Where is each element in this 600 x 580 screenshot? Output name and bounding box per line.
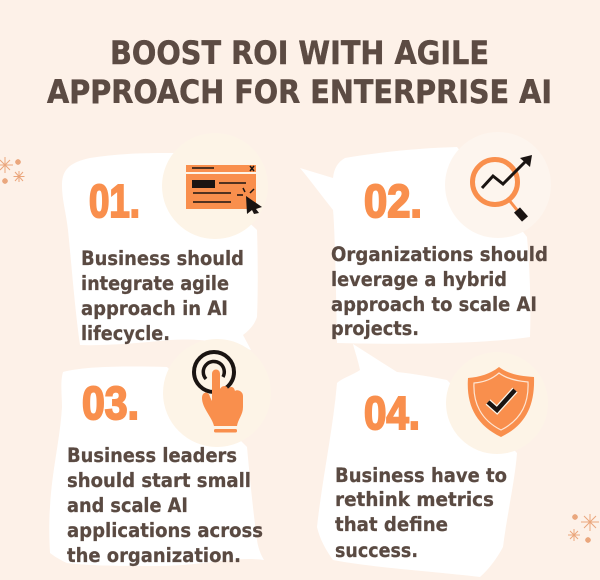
title bbox=[47, 34, 552, 111]
panel 1 text bbox=[81, 247, 244, 345]
panel 3 text: Business leaders bbox=[67, 444, 237, 467]
panel 3 number: 03. bbox=[82, 377, 139, 429]
panel 2 number: 02. bbox=[364, 175, 422, 227]
icon: magnifier with rising chart bbox=[472, 155, 532, 219]
panel 2 bbox=[300, 132, 551, 344]
panel 1 icon backdrop bbox=[162, 133, 268, 239]
panel 4 text: success. bbox=[335, 539, 418, 562]
title: APPROACH FOR ENTERPRISE AI bbox=[47, 73, 552, 111]
panel 3 text: and scale AI bbox=[67, 494, 188, 517]
panel 4 text: that define bbox=[335, 513, 448, 536]
panel 2 text: Organizations should bbox=[331, 243, 548, 266]
panel 2 text: projects. bbox=[331, 317, 419, 340]
panel 3 bbox=[49, 339, 271, 567]
panel 3 text: applications across bbox=[67, 519, 263, 542]
panel 3 text: the organization. bbox=[67, 544, 241, 567]
panel 2 speech bubble bbox=[300, 147, 530, 344]
title: BOOST ROI WITH AGILE bbox=[110, 34, 489, 72]
panel 1 bbox=[62, 133, 268, 350]
panel 3 text bbox=[67, 444, 263, 567]
panel 2 text: leverage a hybrid bbox=[331, 268, 507, 291]
panel 2 text bbox=[331, 243, 548, 340]
panel 1 text: integrate agile bbox=[81, 272, 229, 295]
panel 3 icon backdrop bbox=[163, 339, 271, 447]
panel 1 text: lifecycle. bbox=[81, 322, 170, 345]
panel 4 text: Business have to bbox=[335, 464, 507, 487]
panel 1 number: 01. bbox=[89, 175, 140, 227]
decorative stars: top left bbox=[0, 157, 24, 184]
panel 4 speech bubble bbox=[317, 344, 517, 577]
panel 1 text: approach in AI bbox=[81, 297, 228, 320]
panel 4 icon backdrop bbox=[446, 352, 548, 454]
panel 4 text bbox=[335, 464, 507, 562]
panel 4 bbox=[317, 344, 548, 577]
icon: hand tapping bbox=[194, 352, 243, 432]
icon: browser window with cursor bbox=[186, 165, 262, 214]
panel 4 text: rethink metrics bbox=[335, 488, 494, 511]
panel 2 icon backdrop bbox=[445, 132, 551, 238]
panel 1 text: Business should bbox=[81, 247, 244, 270]
decorative stars: bottom right bbox=[568, 514, 599, 543]
panel 3 text: should start small bbox=[67, 469, 251, 492]
panel 4 number: 04. bbox=[364, 387, 420, 439]
panel 3 speech bubble bbox=[49, 367, 264, 566]
panel 1 speech bubble bbox=[62, 153, 258, 350]
icon: shield with check bbox=[468, 367, 534, 437]
panel 2 text: approach to scale AI bbox=[331, 293, 537, 316]
